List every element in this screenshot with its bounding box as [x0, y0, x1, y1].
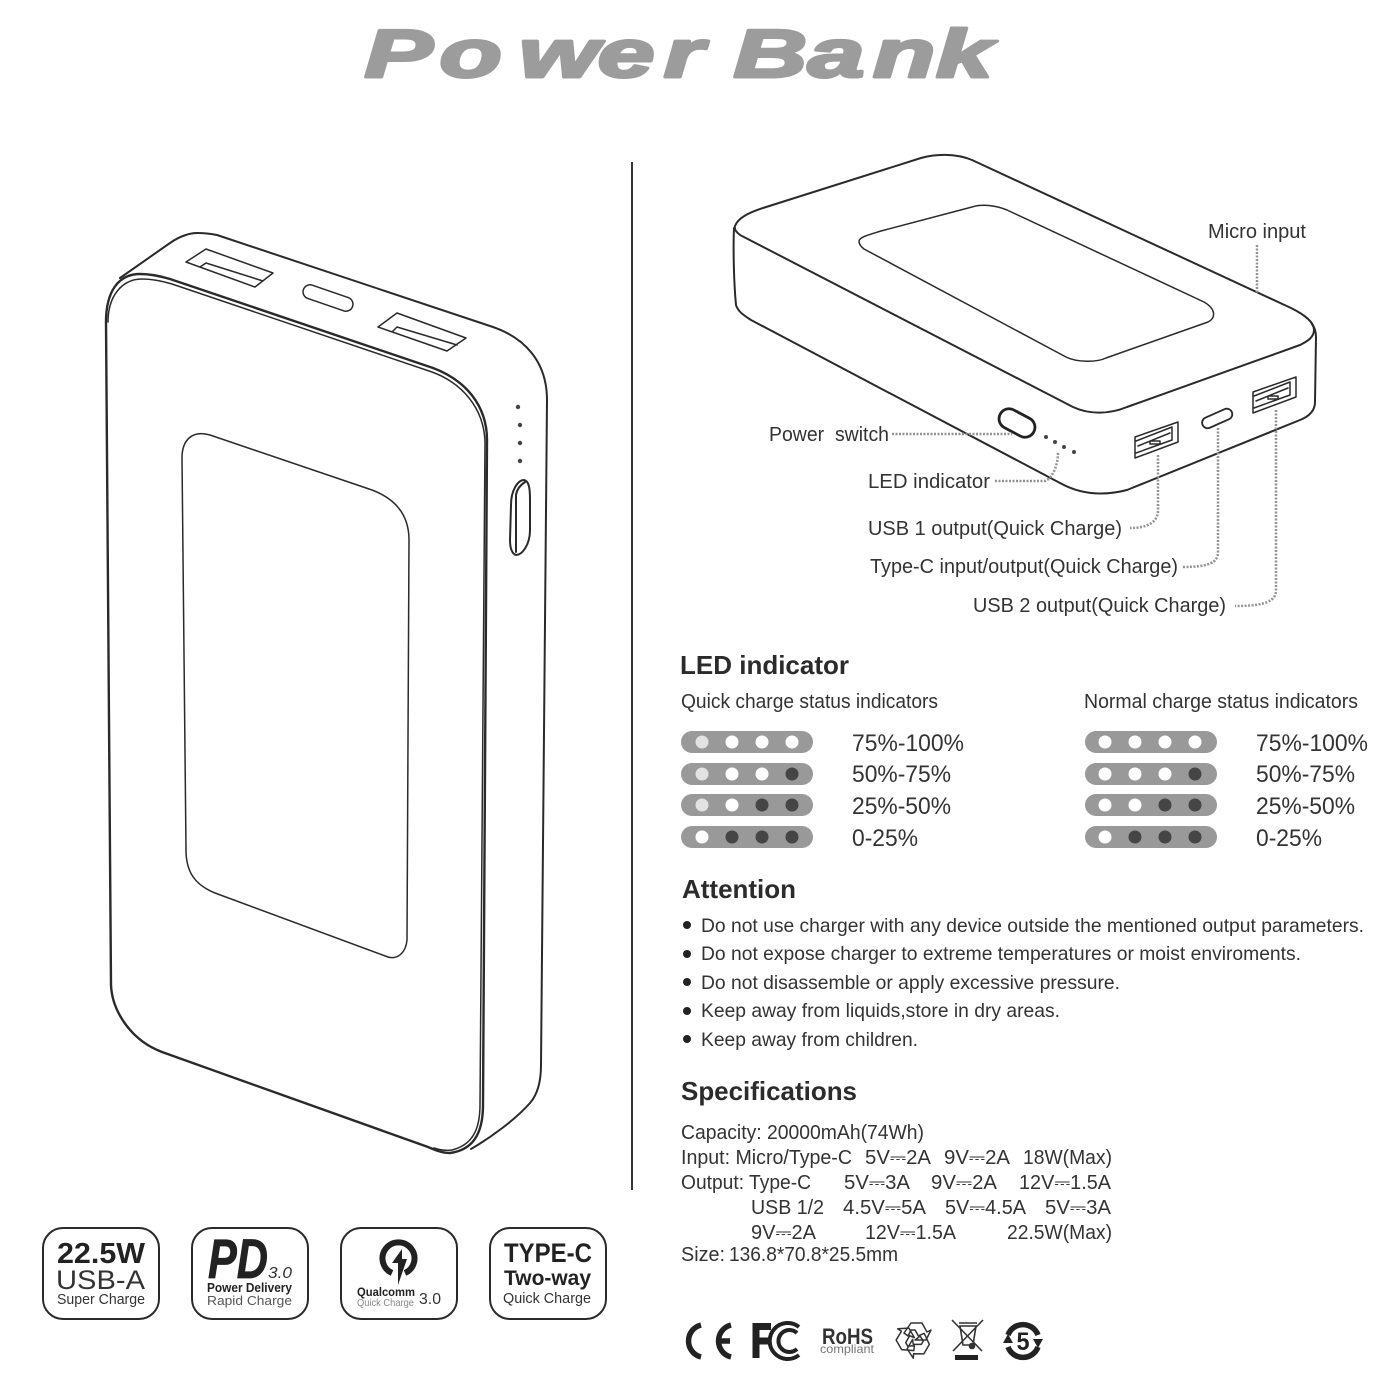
illustration: power bank front view	[106, 233, 547, 1153]
badge: Qualcomm Quick Charge 3.0	[341, 1228, 457, 1319]
LED dots	[516, 405, 522, 463]
heading: Attention: Attention	[682, 874, 796, 904]
attention bullet list: Do not disassemble or apply excessive pressure.	[701, 972, 1120, 994]
icon: CE mark	[689, 1325, 731, 1357]
USB 2 output label	[973, 410, 1276, 617]
icon: 5-year environmental mark: 5	[1016, 1328, 1030, 1356]
certification marks	[689, 1320, 1043, 1362]
specification lines: Size:	[681, 1244, 725, 1266]
USB 1 output label	[868, 455, 1158, 540]
USB 1 port	[1135, 422, 1178, 458]
icon: WEEE crossed bin	[952, 1320, 983, 1360]
Type-C port	[301, 283, 355, 313]
badge: 22.5W USB-A: 22.5W	[57, 1238, 146, 1270]
icon: quick charge bolt	[382, 1242, 414, 1285]
badge: 22.5W USB-A: Super Charge	[57, 1291, 145, 1308]
column: normal charge: 25%-50%	[1256, 793, 1355, 820]
panel: Specifications	[681, 1076, 1112, 1266]
badge: Type-C Two-way	[490, 1228, 606, 1319]
attention bullet list: Do not use charger with any device outside the mentioned output parameters.	[701, 915, 1364, 937]
specification lines: Output: Type-C	[681, 1172, 811, 1194]
specification lines: 9V⎓2A	[751, 1222, 817, 1244]
attention bullet list	[683, 915, 1364, 1051]
column: quick charge	[681, 691, 964, 852]
badge: PD 3.0	[192, 1227, 308, 1319]
title: Power Bank	[364, 17, 997, 92]
Type-C port	[1200, 407, 1234, 430]
badge: 22.5W USB-A	[43, 1228, 159, 1319]
badge: Qualcomm Quick Charge 3.0: Qualcomm	[357, 1285, 415, 1299]
attention bullet list: Do not expose charger to extreme temperatures or moist enviroments.	[701, 943, 1301, 965]
LED dots	[1044, 435, 1076, 454]
specification lines: Input: Micro/Type-C	[681, 1147, 852, 1169]
specification lines: USB 1/2	[751, 1197, 824, 1219]
column: quick charge: 75%-100%	[852, 730, 964, 757]
column: quick charge: 50%-75%	[852, 761, 951, 788]
badge: PD 3.0: PD	[208, 1227, 268, 1290]
USB 2 port	[1253, 377, 1296, 413]
specification lines: 5V⎓4.5A	[945, 1197, 1027, 1219]
panel: Attention	[682, 874, 1364, 1051]
center divider line	[631, 162, 633, 1190]
column: normal charge: 50%-75%	[1256, 761, 1355, 788]
specification lines: Capacity: 20000mAh(74Wh)	[681, 1122, 924, 1144]
Type-C input/output label	[870, 428, 1218, 578]
column: normal charge	[1084, 691, 1368, 852]
specification lines: 22.5W(Max)	[1007, 1222, 1112, 1244]
icon: RoHS compliant	[820, 1324, 875, 1356]
badge: Type-C Two-way: TYPE-C	[504, 1238, 592, 1268]
badge: Type-C Two-way: Two-way	[504, 1267, 591, 1290]
badge: PD 3.0: Rapid Charge	[207, 1293, 292, 1308]
icon: FC mark	[756, 1323, 799, 1359]
badge: Type-C Two-way: Quick Charge	[503, 1290, 591, 1307]
LED indicator label: LED indicator	[868, 471, 990, 493]
icon: 5-year environmental mark	[1003, 1325, 1043, 1357]
Micro input label: Micro input	[1208, 221, 1306, 243]
column: normal charge: 75%-100%	[1256, 730, 1368, 757]
inner panel outline	[182, 434, 409, 958]
icon: RoHS compliant: RoHS	[822, 1324, 873, 1349]
illustration: power bank top perspective view	[734, 155, 1316, 494]
specification lines	[681, 1122, 1112, 1266]
power switch	[996, 405, 1038, 441]
heading: Specifications: Specifications	[681, 1076, 857, 1106]
specification lines: 136.8*70.8*25.5mm	[729, 1244, 898, 1266]
attention bullet list: Keep away from children.	[701, 1029, 918, 1051]
attention bullet list: Keep away from liquids,store in dry areas.	[701, 1000, 1060, 1022]
badge: PD 3.0: Power Delivery	[207, 1281, 292, 1295]
Type-C input/output label: Type-C input/output(Quick Charge)	[870, 556, 1178, 578]
badge: PD 3.0: 3.0	[268, 1265, 292, 1282]
column: quick charge: 25%-50%	[852, 793, 951, 820]
specification lines: 12V⎓1.5A	[1019, 1172, 1112, 1194]
USB 1 output label: USB 1 output(Quick Charge)	[868, 518, 1122, 540]
Micro input label	[1208, 221, 1306, 293]
badge: 22.5W USB-A: USB-A	[56, 1265, 145, 1295]
specification lines: 9V⎓2A	[944, 1147, 1011, 1169]
top inner panel	[859, 205, 1214, 361]
USB 2 output label: USB 2 output(Quick Charge)	[973, 595, 1226, 617]
callouts: part labels with dotted leaders	[769, 221, 1306, 617]
specification lines: 4.5V⎓5A	[843, 1197, 927, 1219]
USB port 1	[186, 249, 273, 287]
power switch	[510, 480, 530, 555]
specification lines: 18W(Max)	[1023, 1147, 1112, 1169]
USB port 2	[378, 313, 466, 351]
specification lines: 5V⎓2A	[865, 1147, 932, 1169]
icon: RoHS compliant: compliant	[820, 1342, 875, 1356]
specification lines: 5V⎓3A	[1045, 1197, 1112, 1219]
column: quick charge: Quick charge status indicators	[681, 691, 938, 713]
heading: LED indicator: LED indicator	[680, 650, 849, 680]
column: normal charge: Normal charge status indicators	[1084, 691, 1358, 713]
column: normal charge: 0-25%	[1256, 825, 1322, 852]
column: quick charge: 0-25%	[852, 825, 918, 852]
panel: LED indicator	[680, 650, 1368, 852]
specification lines: 5V⎓3A	[844, 1172, 911, 1194]
badge: Qualcomm Quick Charge 3.0: 3.0	[419, 1291, 441, 1308]
LED indicator label	[868, 452, 1058, 493]
badge: Qualcomm Quick Charge 3.0: Quick Charge	[357, 1298, 414, 1309]
icon: recycling triangle	[892, 1323, 933, 1362]
specification lines: 12V⎓1.5A	[865, 1222, 957, 1244]
specification lines: 9V⎓2A	[931, 1172, 998, 1194]
Power switch label: Power switch	[769, 424, 889, 446]
